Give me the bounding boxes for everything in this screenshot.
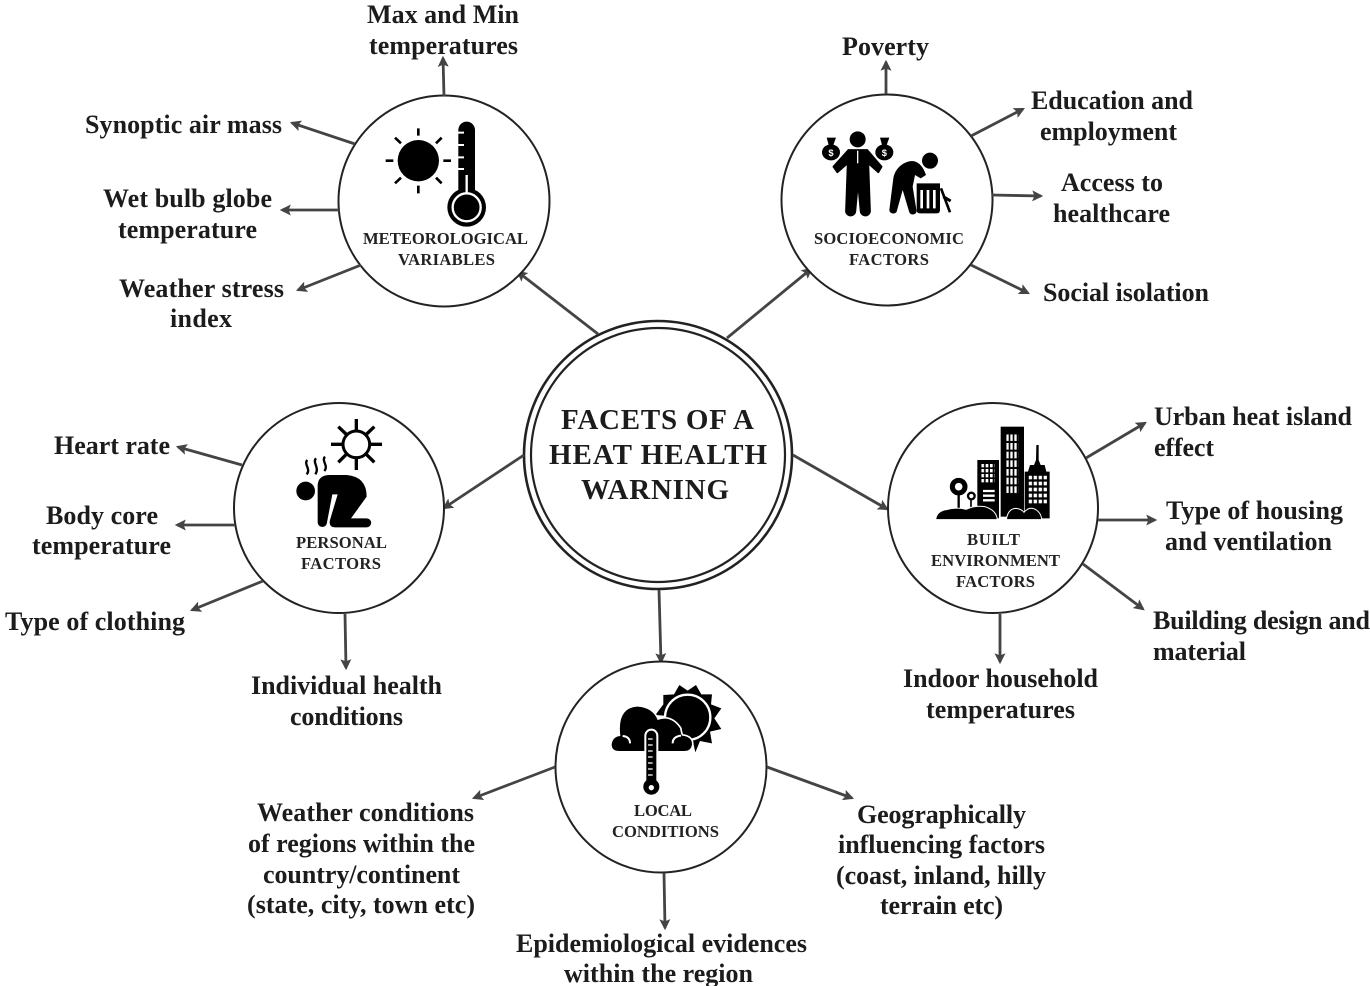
- panel: meteorological variables: [338, 96, 550, 306]
- panel: local conditions: [556, 662, 766, 872]
- text: geographically influencing factors: [836, 800, 1046, 920]
- arrow: to access to healthcare: [992, 195, 1041, 196]
- panel: socioeconomic factors: [782, 94, 992, 306]
- icon: city buildings and trees: [936, 427, 1050, 520]
- central circle: facets of a heat health warning: [524, 321, 792, 589]
- panel: built environment factors: ENVIRONMENT: [931, 551, 1060, 570]
- icon: sun behind cloud with thermometer: [612, 685, 721, 796]
- text: poverty: Poverty: [842, 32, 929, 61]
- panel: local conditions: LOCAL: [634, 801, 692, 820]
- text: weather conditions of regions: Weather conditions: [257, 798, 474, 827]
- text: indoor household temperatures: [903, 664, 1099, 724]
- arrow: to building design and material: [1083, 564, 1143, 609]
- icon: rich man and man searching bin: [822, 131, 951, 216]
- text: weather conditions of regions: country/continent: [263, 860, 460, 889]
- text: individual health conditions: conditions: [290, 702, 403, 731]
- text: access to healthcare: Access to: [1061, 168, 1163, 197]
- text: type of housing and ventilation: Type of housing: [1166, 496, 1343, 525]
- text: geographically influencing factors: terrain etc): [880, 891, 1003, 920]
- arrow: centre to personal factors: [444, 455, 524, 508]
- text: geographically influencing factors: influencing factors: [838, 830, 1045, 859]
- text: indoor household temperatures: Indoor household: [903, 664, 1099, 693]
- text: type of housing and ventilation: [1165, 496, 1343, 556]
- arrow: to body core temperature: [177, 524, 235, 526]
- text: weather stress index: Weather stress: [119, 274, 284, 303]
- text: max and min temperatures: temperatures: [369, 31, 518, 60]
- text: wet bulb globe temperature: Wet bulb globe: [103, 184, 272, 213]
- text: education and employment: employment: [1040, 117, 1177, 146]
- text: access to healthcare: healthcare: [1053, 199, 1170, 228]
- arrow: to geographically influencing factors: [767, 767, 852, 798]
- text: education and employment: [1031, 86, 1194, 146]
- text: building design and material: Building design and: [1153, 606, 1370, 635]
- text: epidemiological evidences: Epidemiological evidences: [516, 929, 807, 958]
- text: individual health conditions: Individual health: [251, 671, 443, 700]
- panel: built environment factors: [888, 403, 1098, 613]
- text: social isolation: Social isolation: [1043, 278, 1210, 307]
- panel: personal factors: PERSONAL: [296, 533, 387, 552]
- panel: personal factors: FACTORS: [301, 554, 381, 573]
- text: wet bulb globe temperature: temperature: [118, 215, 257, 244]
- text: body core temperature: Body core: [46, 501, 158, 530]
- text: weather conditions of regions: [247, 798, 475, 919]
- arrow: to epidemiological evidences: [664, 873, 665, 928]
- text: epidemiological evidences: [516, 929, 807, 986]
- text: access to healthcare: [1053, 168, 1170, 228]
- icon: sun and thermometer: [386, 122, 486, 227]
- central circle: facets of a heat health warning: FACETS OF A: [561, 404, 754, 436]
- panel: meteorological variables: VARIABLES: [398, 250, 495, 269]
- arrow: centre to meteorological variables: [518, 272, 598, 334]
- text: weather conditions of regions: (state, city, town etc): [247, 890, 475, 919]
- text: wet bulb globe temperature: [103, 184, 272, 244]
- arrow: to education and employment: [971, 109, 1023, 136]
- text: type of clothing: Type of clothing: [5, 607, 185, 636]
- arrow: centre to built environment factors: [793, 455, 887, 509]
- arrow: centre to socioeconomic factors: [727, 269, 811, 338]
- panel: meteorological variables: METEOROLOGICAL: [363, 229, 528, 248]
- text: urban heat island effect: Urban heat island: [1154, 402, 1353, 431]
- text: weather stress index: [119, 274, 284, 333]
- text: body core temperature: temperature: [32, 531, 171, 560]
- panel: socioeconomic factors: FACTORS: [849, 250, 929, 269]
- central circle: facets of a heat health warning: HEAT HEALTH: [549, 439, 767, 471]
- arrow: centre to local conditions: [659, 590, 661, 662]
- text: individual health conditions: [251, 671, 443, 731]
- text: heart rate: Heart rate: [54, 431, 170, 460]
- arrow: to weather stress index: [298, 265, 361, 290]
- arrow: to poverty: [885, 62, 887, 94]
- text: max and min temperatures: [367, 0, 520, 60]
- text: geographically influencing factors: (coast, inland, hilly: [836, 861, 1046, 890]
- panel: personal factors: [234, 403, 444, 613]
- text: indoor household temperatures: temperatures: [926, 695, 1075, 724]
- arrow: to individual health conditions: [345, 614, 346, 668]
- text: weather conditions of regions: of regions within the: [248, 829, 475, 858]
- text: urban heat island effect: effect: [1154, 433, 1214, 462]
- text: building design and material: [1153, 606, 1370, 666]
- arrow: to synoptic air mass: [292, 123, 355, 144]
- arrow: to heart rate: [178, 447, 242, 465]
- panel: built environment factors: FACTORS: [956, 572, 1035, 591]
- arrow: to indoor household temperatures: [999, 614, 1001, 662]
- arrow: to type of housing and ventilation: [1098, 519, 1155, 521]
- icon: rich man and man searching bin: $: [882, 148, 888, 158]
- arrow: to type of clothing: [192, 581, 263, 610]
- text: urban heat island effect: [1154, 402, 1353, 462]
- panel: built environment factors: BUILT: [967, 530, 1020, 549]
- icon: rich man and man searching bin: $: [828, 148, 834, 158]
- arrow: to wet bulb globe temperature: [282, 209, 340, 211]
- arrow: to urban heat island effect: [1086, 423, 1145, 458]
- arrow: to social isolation: [971, 265, 1028, 293]
- text: building design and material: material: [1153, 637, 1246, 666]
- arrow: to max and min temperatures: [443, 58, 444, 96]
- text: body core temperature: [32, 501, 171, 560]
- text: geographically influencing factors: Geographically: [857, 800, 1026, 829]
- arrow: to weather conditions of regions: [474, 767, 555, 798]
- central circle: facets of a heat health warning: WARNING: [581, 474, 729, 506]
- text: education and employment: Education and: [1031, 86, 1194, 115]
- text: max and min temperatures: Max and Min: [367, 0, 520, 29]
- text: synoptic air mass: Synoptic air mass: [85, 110, 282, 139]
- panel: local conditions: CONDITIONS: [612, 822, 719, 841]
- icon: person bent over in the heat under the sun: [296, 419, 382, 527]
- text: weather stress index: index: [170, 304, 232, 333]
- text: type of housing and ventilation: and ventilation: [1165, 527, 1333, 556]
- panel: socioeconomic factors: SOCIOECONOMIC: [814, 229, 964, 248]
